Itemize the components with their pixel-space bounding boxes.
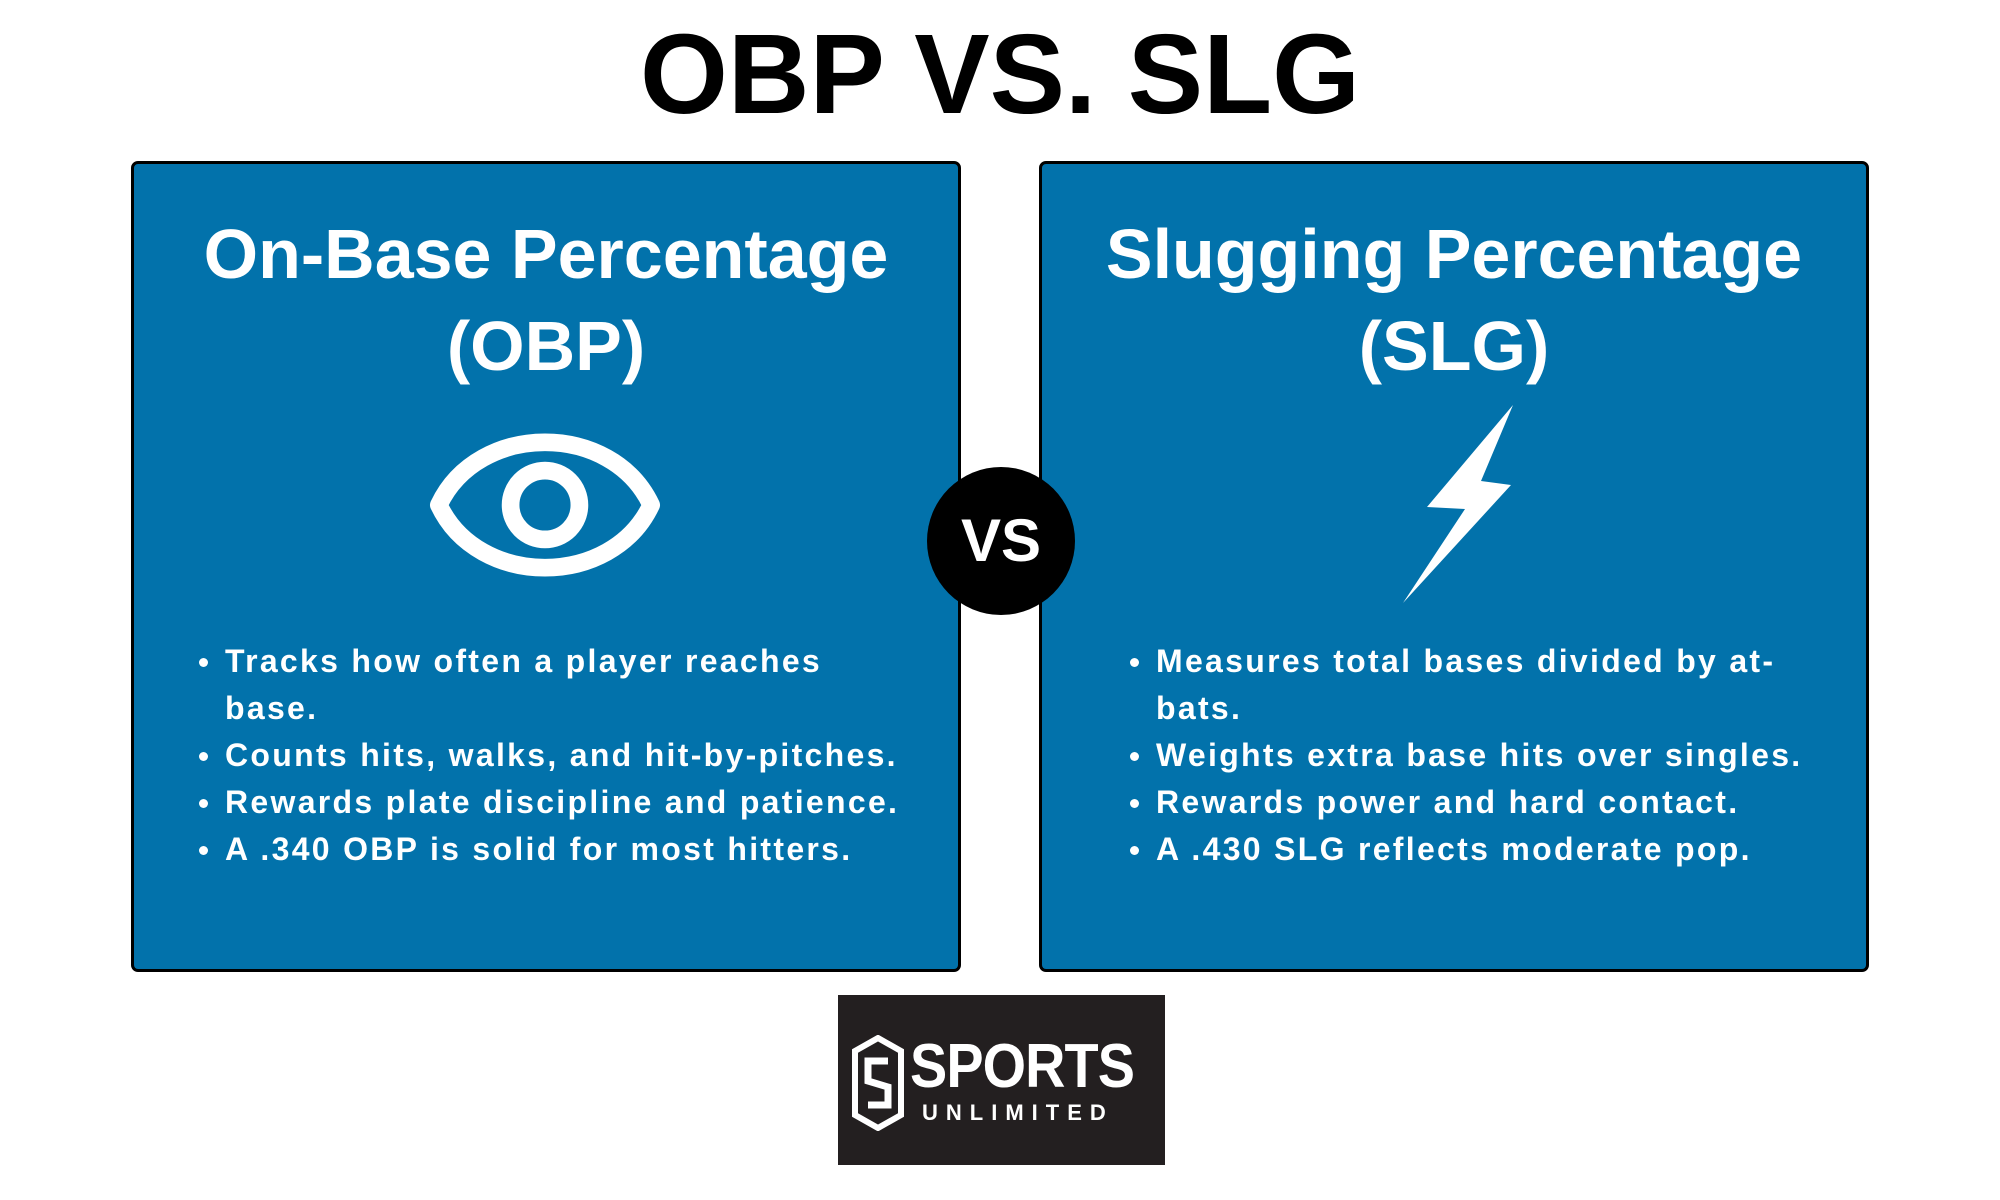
logo icon: S hexagon [852, 1035, 904, 1131]
VS badge: VS [961, 507, 1041, 574]
bullet list: OBP: Rewards plate discipline and patience. [225, 784, 899, 820]
icon: eye [430, 434, 660, 576]
heading: Slugging Percentage: (SLG) [1359, 307, 1549, 385]
bullet list: SLG: Rewards power and hard contact. [1156, 784, 1739, 820]
bullet list: OBP: Tracks how often a player reaches [225, 643, 822, 679]
heading: Slugging Percentage [1106, 215, 1802, 385]
bullet list: SLG: bats. [1156, 690, 1242, 726]
bullet list: OBP: Counts hits, walks, and hit-by-pitches. [225, 737, 898, 773]
bullet list: SLG: Measures total bases divided by at- [1156, 643, 1775, 679]
bullet list: OBP: A .340 OBP is solid for most hitters. [225, 831, 852, 867]
panel: OBP [131, 161, 961, 972]
heading: On-Base Percentage: (OBP) [447, 307, 645, 385]
icon: lightning bolt [1403, 405, 1513, 603]
bullet list: OBP: base. [225, 690, 318, 726]
bullet list: OBP [199, 643, 899, 867]
heading: On-Base Percentage: On-Base Percentage [204, 215, 888, 293]
heading: Slugging Percentage: Slugging Percentage [1106, 215, 1802, 293]
bullet list: SLG: Weights extra base hits over singles. [1156, 737, 1802, 773]
logo text: SPORTS [910, 1032, 1134, 1101]
logo: Sports Unlimited [838, 995, 1165, 1165]
VS badge [927, 467, 1075, 615]
title: OBP VS. SLG [640, 11, 1360, 137]
bullet list: SLG [1130, 643, 1802, 867]
heading: On-Base Percentage [204, 215, 888, 385]
bullet list: SLG: A .430 SLG reflects moderate pop. [1156, 831, 1752, 867]
panel: SLG [1039, 161, 1869, 972]
logo: Sports Unlimited: UNLIMITED [922, 1100, 1114, 1125]
